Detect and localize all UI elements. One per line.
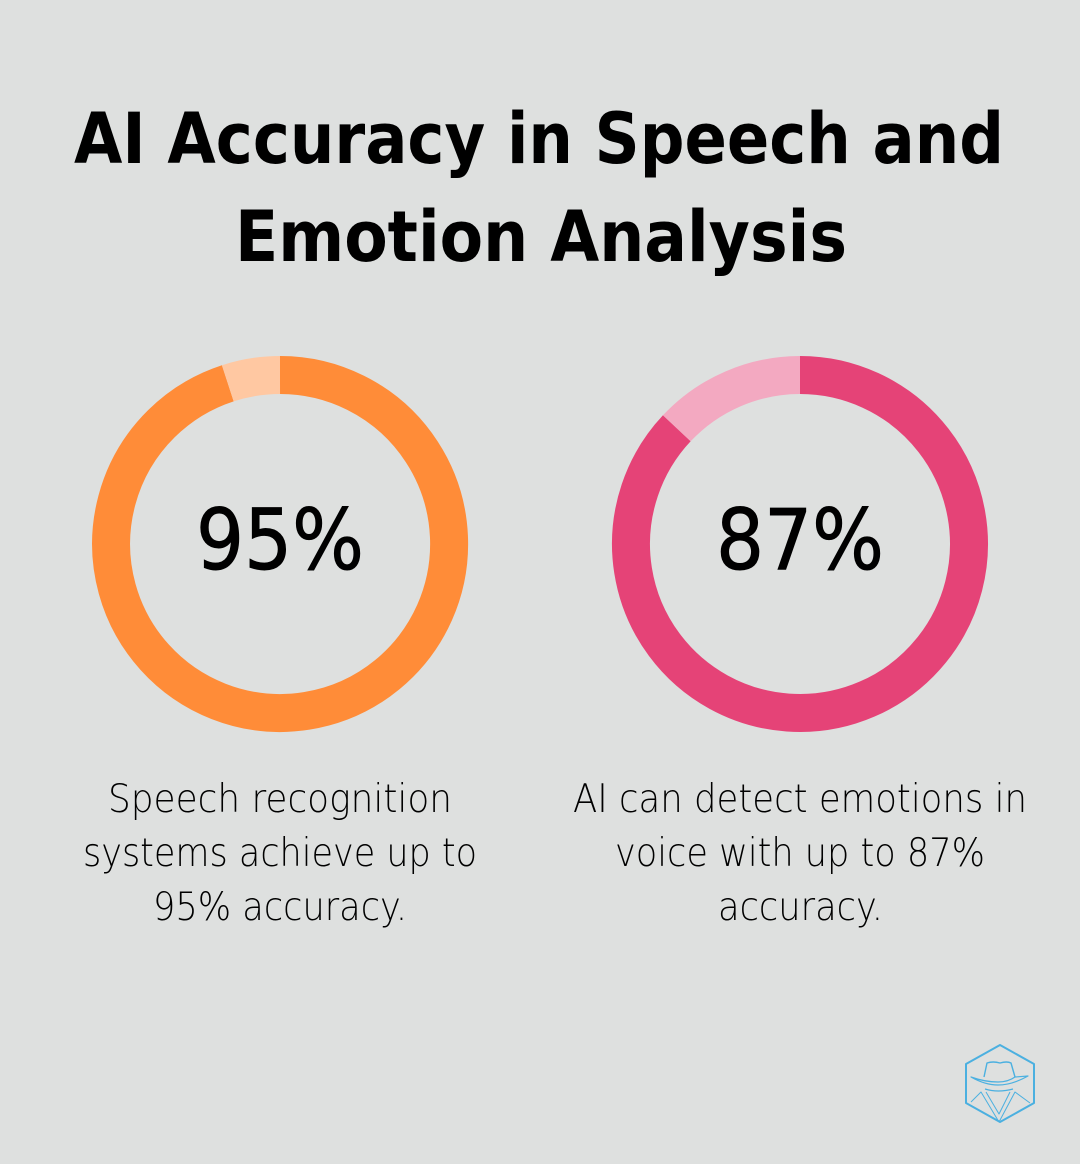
- value: 95%: 95%: [196, 491, 364, 589]
- value: 87%: 87%: [716, 491, 884, 589]
- text block: speech recognition description: Speech recognition: [108, 777, 452, 822]
- text block: speech recognition description: [83, 777, 477, 930]
- title: Emotion Analysis: [235, 196, 847, 278]
- ring segment: 95% share: [111, 375, 449, 713]
- ring segment: remaining 13%: [677, 375, 800, 428]
- ring segment: remaining 5%: [228, 375, 280, 383]
- donut chart: speech recognition 95%: [111, 375, 449, 713]
- text block: speech recognition description: 95% accuracy.: [153, 885, 407, 930]
- text block: emotion detection description: accuracy.: [718, 885, 883, 930]
- icon: hexagon logo with hat and coat: [966, 1045, 1034, 1122]
- ring segment: 87% share: [631, 375, 969, 713]
- text block: emotion detection description: voice with up to 87%: [615, 831, 985, 876]
- text block: speech recognition description: systems achieve up to: [83, 831, 477, 876]
- donut chart: emotion detection 87%: [631, 375, 969, 713]
- title: [74, 98, 1004, 278]
- text block: emotion detection description: AI can detect emotions in: [573, 777, 1027, 822]
- text block: emotion detection description: [573, 777, 1027, 930]
